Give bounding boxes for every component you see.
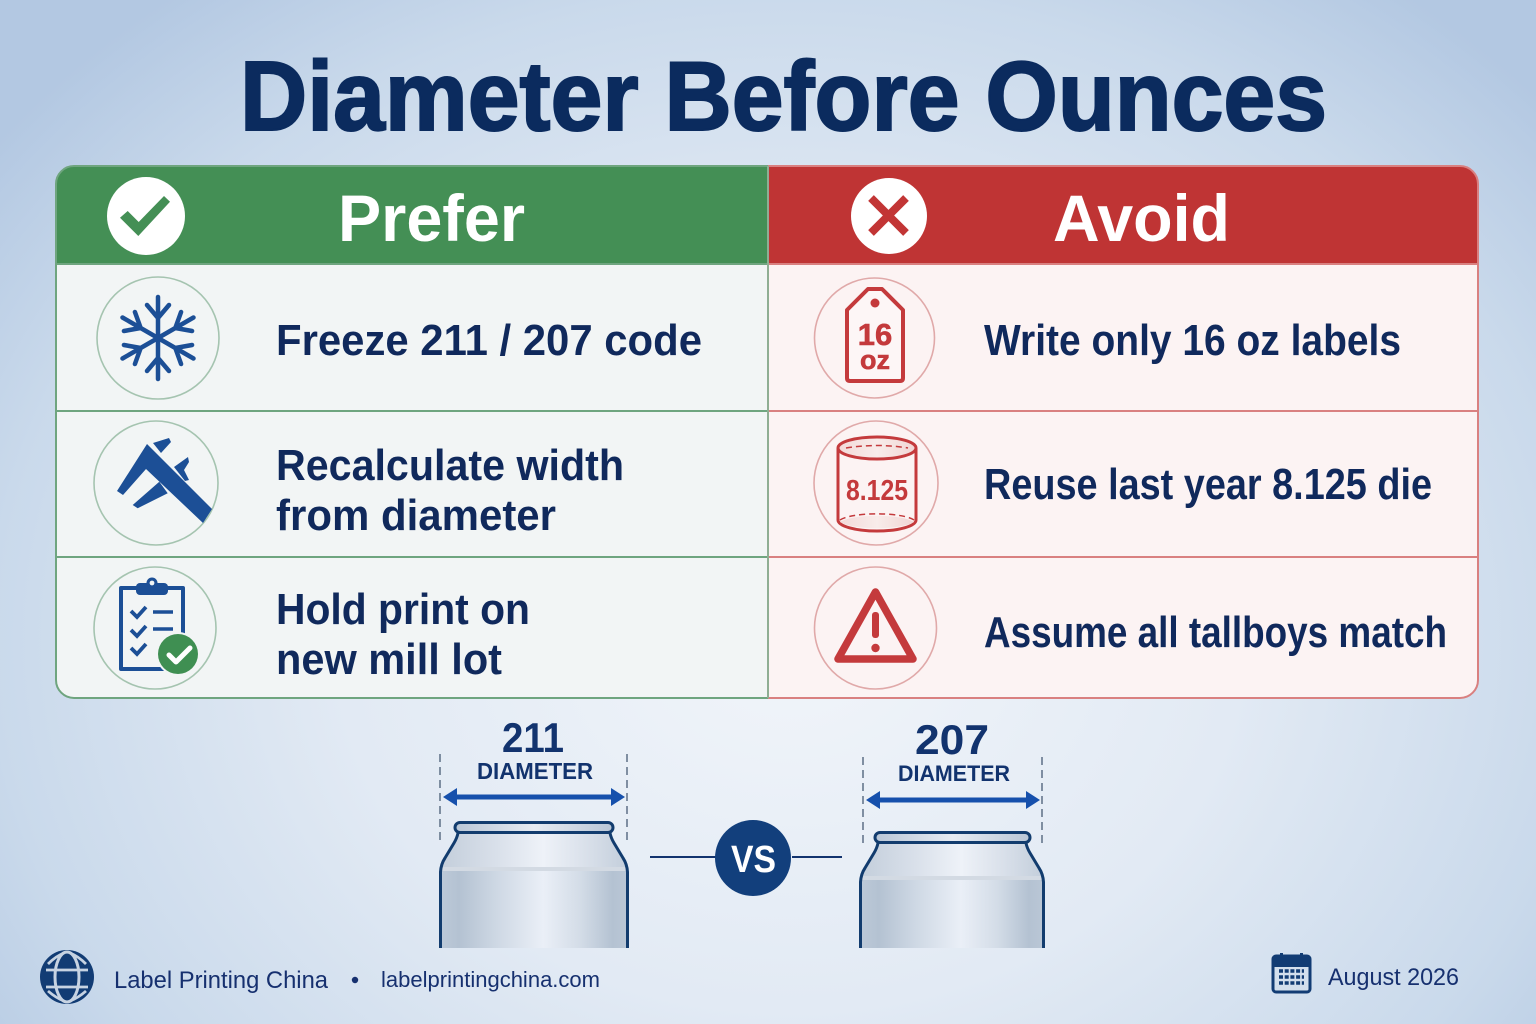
row text: from diameter <box>276 491 556 540</box>
211 number: 211 <box>502 714 564 761</box>
icon: 16 oz tag: 16 <box>858 317 892 352</box>
row text <box>276 441 624 540</box>
row text: Assume all tallboys match <box>984 608 1447 657</box>
207 number: 207 <box>915 716 989 763</box>
footer <box>40 950 1459 1004</box>
diameter label: DIAMETER <box>898 761 1010 786</box>
icon: 16 oz tag <box>814 278 934 398</box>
diameter label: DIAMETER <box>477 758 593 784</box>
icon: caliper <box>94 421 218 545</box>
icon: calendar <box>1273 953 1310 992</box>
comparison table <box>56 166 1478 698</box>
icon: cross <box>851 178 927 254</box>
icon: clipboard checklist <box>94 567 216 689</box>
avoid row 1 <box>814 278 1401 398</box>
row text <box>276 585 530 684</box>
panel: prefer <box>56 166 768 698</box>
row text: new mill lot <box>276 635 502 684</box>
avoid row 2 <box>814 421 1432 545</box>
can 207 <box>860 832 1044 948</box>
prefer row dividers <box>56 264 768 557</box>
versus badge <box>650 820 842 896</box>
can 211 <box>440 822 628 948</box>
prefer panel background <box>57 265 767 697</box>
can comparison diagram <box>440 714 1044 948</box>
prefer row 3 <box>94 567 530 689</box>
table outline <box>56 166 1478 698</box>
versus badge: VS <box>731 839 776 881</box>
width arrow <box>866 791 1040 809</box>
prefer row 1 <box>97 277 702 399</box>
brand name: Label Printing China <box>114 967 329 994</box>
width arrow <box>443 788 625 806</box>
avoid row 3 <box>814 567 1447 689</box>
row text: Reuse last year 8.125 die <box>984 460 1432 509</box>
dashed guides <box>440 754 627 845</box>
avoid heading: Avoid <box>1053 181 1230 255</box>
icon: warning triangle <box>814 567 936 689</box>
prefer heading: Prefer <box>338 181 525 255</box>
row text: Write only 16 oz labels <box>984 316 1401 365</box>
icon: check <box>107 177 185 255</box>
prefer header bar <box>56 166 768 264</box>
row text: Recalculate width <box>276 441 624 490</box>
panel: avoid <box>768 166 1478 698</box>
can 211 group <box>440 714 628 948</box>
icon: 16 oz tag: oz <box>860 345 890 375</box>
icon: snowflake <box>97 277 219 399</box>
title: Diameter Before Ounces <box>240 41 1327 151</box>
row text: Freeze 211 / 207 code <box>276 316 702 365</box>
row text: Hold print on <box>276 585 530 634</box>
date: August 2026 <box>1328 964 1459 991</box>
avoid header bar <box>768 166 1478 264</box>
dashed guides <box>863 757 1042 848</box>
can 207 group <box>860 716 1044 948</box>
icon: 8.125 cylinder: 8.125 <box>846 475 908 507</box>
icon: globe <box>40 950 94 1004</box>
avoid row dividers <box>768 264 1478 557</box>
avoid panel background <box>769 265 1477 697</box>
separator dot <box>352 977 358 983</box>
website: labelprintingchina.com <box>381 967 600 992</box>
prefer row 2 <box>94 421 624 545</box>
icon: 8.125 cylinder <box>814 421 938 545</box>
